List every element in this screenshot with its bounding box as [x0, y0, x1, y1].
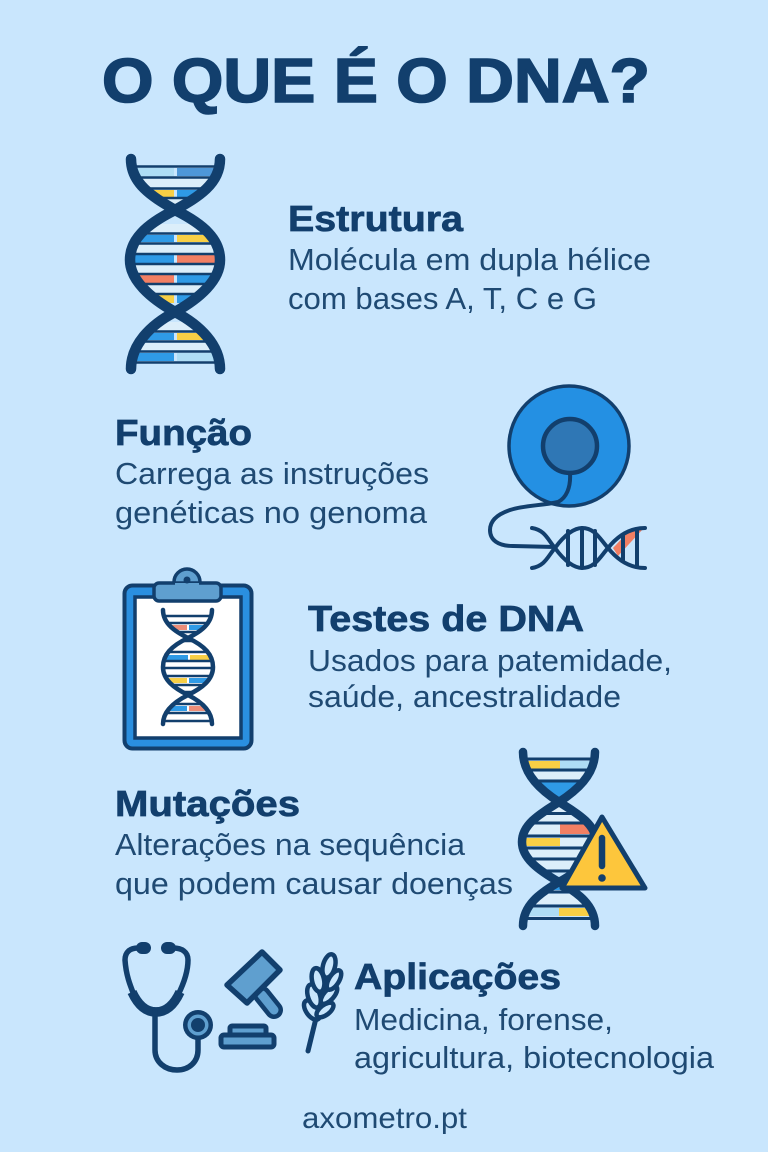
text: estrutura line 2: com bases A, T, C e G [288, 281, 597, 316]
heading: função: Função [115, 412, 252, 453]
text: função line 2: genéticas no genoma [115, 495, 428, 530]
text: aplicações line 1: Medicina, forense, [354, 1002, 613, 1037]
heading: estrutura: Estrutura [288, 198, 464, 239]
panel: mutações [115, 752, 645, 926]
icon: cell with dna thread [490, 386, 645, 568]
icon: dna double helix [125, 159, 227, 369]
title: O QUE É O DNA? [102, 47, 650, 116]
icon: wheat [301, 953, 344, 1051]
text: aplicações line 2: agricultura, biotecnologia [354, 1040, 715, 1075]
panel: testes de dna [124, 569, 672, 748]
text: mutações line 2: que podem causar doenças [115, 866, 513, 901]
text: mutações line 1: Alterações na sequência [115, 827, 466, 862]
text: testes line 2: saúde, ancestralidade [308, 679, 621, 714]
panel: aplicações [125, 942, 715, 1075]
footer: axometro.pt [302, 1102, 468, 1135]
text: testes line 1: Usados para patemidade, [308, 643, 672, 678]
icon: clipboard with dna [124, 569, 252, 748]
icon: gavel [221, 952, 280, 1047]
text: estrutura line 1: Molécula em dupla hélice [288, 242, 651, 277]
heading: mutações: Mutações [115, 783, 300, 824]
panel: função [115, 386, 645, 568]
icon: stethoscope [125, 942, 213, 1070]
text: função line 1: Carrega as instruções [115, 456, 429, 491]
icon: dna with warning triangle [520, 752, 645, 926]
panel: estrutura [125, 159, 651, 369]
heading: testes de dna: Testes de DNA [308, 598, 584, 639]
heading: aplicações: Aplicações [354, 956, 561, 997]
